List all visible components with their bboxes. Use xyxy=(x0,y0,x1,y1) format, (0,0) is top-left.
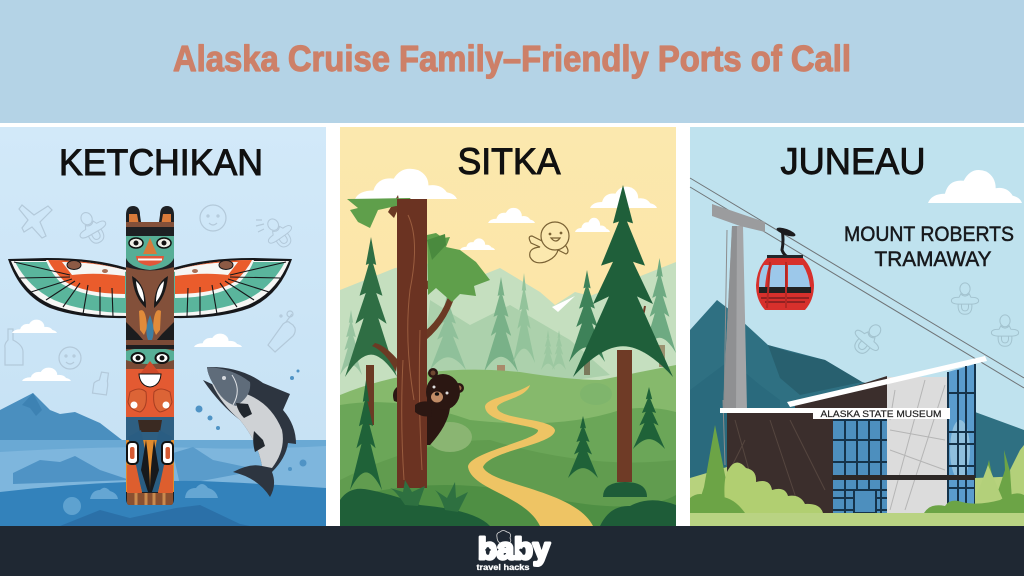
cables xyxy=(690,178,1024,388)
subheading: Mount Roberts Tramaway: TRAMAWAY xyxy=(874,248,992,271)
logo: baby travel hacks: baby xyxy=(478,531,551,566)
panel: Sitka xyxy=(340,127,676,526)
foliage and ground xyxy=(690,425,1024,526)
heading: Juneau: JUNEAU xyxy=(780,141,926,182)
pacifier icons xyxy=(847,283,1019,361)
background baby icons xyxy=(5,205,299,395)
heading: Sitka: SITKA xyxy=(458,141,561,182)
title: Alaska Cruise Family–Friendly Ports of Call xyxy=(173,38,851,79)
bubbles xyxy=(196,370,306,471)
panel: Ketchikan xyxy=(0,127,326,526)
title banner xyxy=(0,0,1024,123)
logo icon xyxy=(497,530,511,544)
icon: eagle wings xyxy=(8,258,292,318)
footer bar xyxy=(0,526,1024,576)
tall trunk with leaves xyxy=(347,195,490,488)
hills xyxy=(340,365,676,526)
heading: Ketchikan: KETCHIKAN xyxy=(59,142,263,183)
bear body behind trunk xyxy=(427,398,450,445)
tram tower xyxy=(712,204,765,465)
mountains xyxy=(690,300,1024,490)
gondola xyxy=(756,226,814,310)
museum sign: ALASKA STATE MUSEUM xyxy=(820,409,942,420)
icon: leaping salmon xyxy=(196,367,306,497)
mountains xyxy=(340,262,676,400)
subheading: Mount Roberts Tramaway: MOUNT ROBERTS xyxy=(844,223,1014,246)
mountains and sea xyxy=(0,393,326,526)
black bear peeking xyxy=(393,368,464,416)
left spruce xyxy=(345,237,397,490)
winding trail xyxy=(468,385,593,526)
subheading: Mount Roberts Tramaway xyxy=(844,223,1014,271)
clouds xyxy=(12,320,242,381)
panel: Juneau xyxy=(690,127,1024,526)
cloud xyxy=(928,170,1022,203)
icon: baby outline xyxy=(529,222,569,263)
foreground trees xyxy=(340,185,676,526)
logo: baby travel hacks: travel hacks xyxy=(476,563,530,572)
background pale trees xyxy=(340,258,676,393)
totem pole xyxy=(126,206,174,505)
Alaska State Museum building xyxy=(720,356,987,513)
clouds xyxy=(355,169,657,250)
